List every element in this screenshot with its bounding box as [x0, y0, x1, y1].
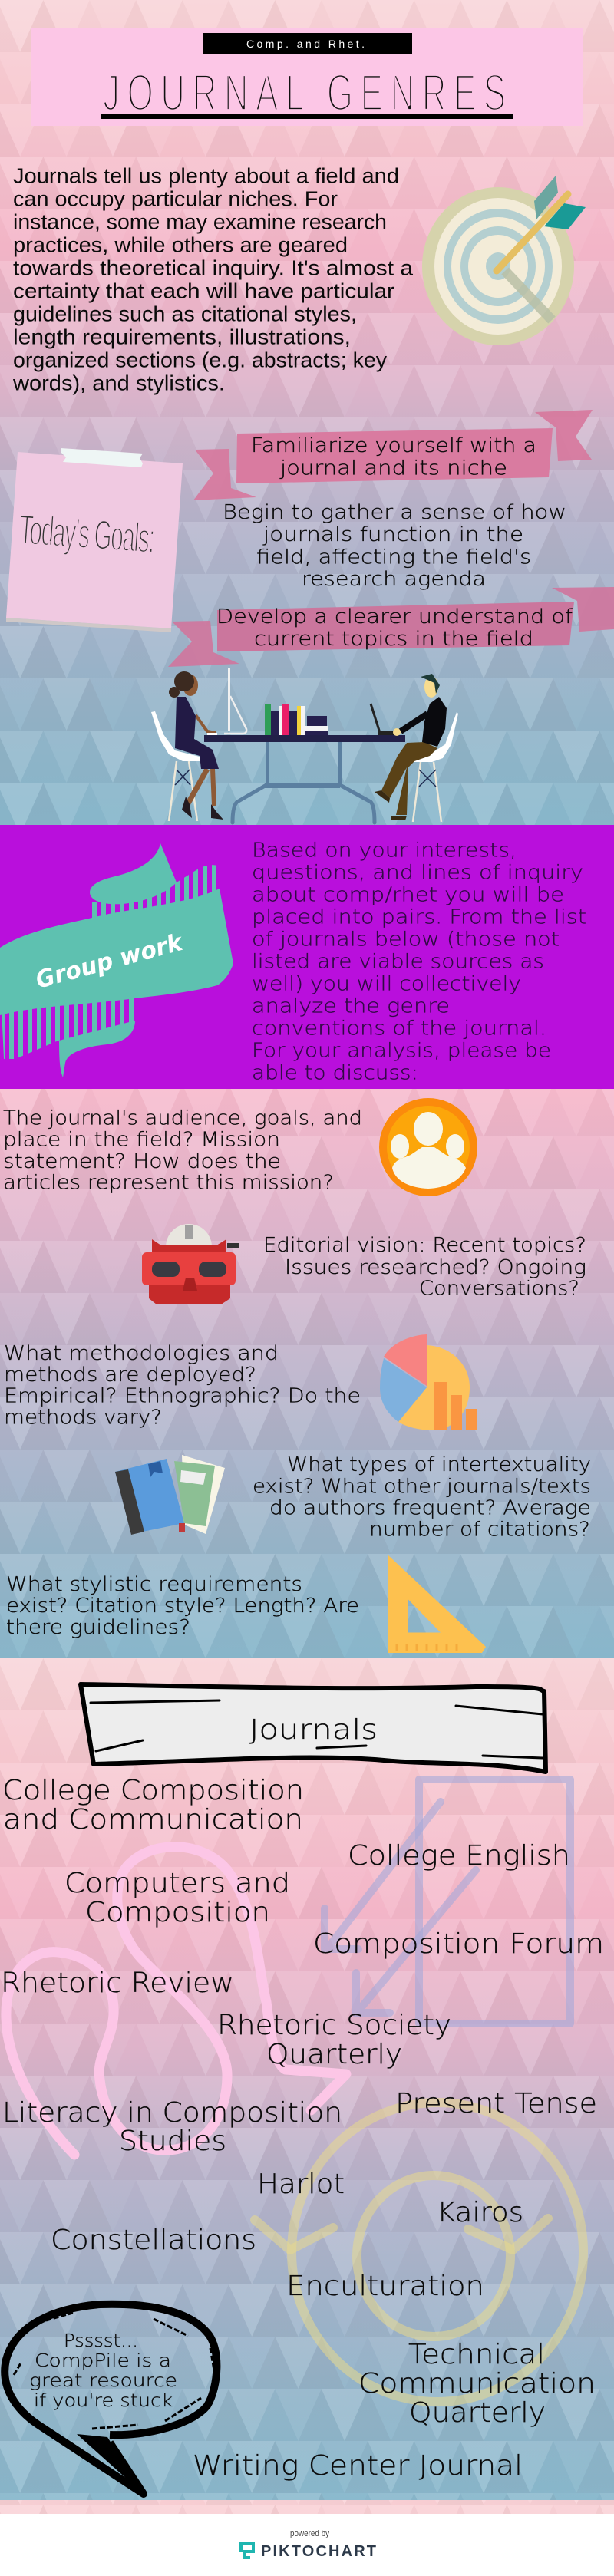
monitor	[207, 668, 246, 735]
group work instructions: listed are viable sources as	[252, 950, 544, 973]
ribbon: goal one	[193, 410, 593, 500]
journal: College English: College English	[348, 1840, 570, 1872]
icon: Piktochart logo	[241, 2544, 253, 2558]
group work instructions: well) you will collectively	[252, 973, 521, 996]
footer: powered by Piktochart	[0, 2514, 614, 2576]
goal three text	[216, 605, 573, 651]
question: intertextuality: do authors frequent? Average	[269, 1497, 591, 1520]
decoration: blue rectangle with arrows	[325, 1779, 570, 2024]
panel: today's goals note	[6, 448, 183, 632]
goal two text	[223, 501, 566, 591]
question: editorial vision: Issues researched? Ongoing	[285, 1256, 586, 1279]
question: intertextuality: exist? What other journals/texts	[253, 1476, 591, 1499]
journal: Writing Center Journal: Writing Center Journal	[193, 2450, 523, 2482]
intro paragraph: practices, while others are geared	[13, 233, 348, 256]
journal: Rhetoric Review: Rhetoric Review	[1, 1967, 234, 1999]
question: methodologies	[4, 1342, 361, 1429]
journal: Enculturation: Enculturation	[286, 2271, 484, 2302]
goal two text: journals function in the	[262, 523, 523, 546]
question: audience and goals: articles represent this mission?	[3, 1172, 334, 1195]
tape	[61, 448, 143, 467]
journal: Computers and Composition	[64, 1868, 290, 1928]
question: audience and goals: place in the field? Mission	[3, 1128, 280, 1151]
question: methodologies: methods vary?	[4, 1406, 162, 1429]
laptop	[371, 704, 395, 735]
question: intertextuality: number of citations?	[369, 1518, 590, 1541]
question: stylistic requirements: there guidelines?	[6, 1616, 190, 1639]
question: editorial vision	[263, 1234, 586, 1300]
group work instructions: able to discuss:	[252, 1062, 418, 1085]
journal: Literacy in Composition Studies: Studies	[119, 2126, 226, 2157]
journal: Present Tense: Present Tense	[395, 2088, 597, 2119]
group work instructions: conventions of the journal.	[252, 1018, 546, 1041]
question: stylistic requirements	[6, 1573, 359, 1639]
ribbon: group work	[0, 843, 233, 1077]
journal: Technical Communication Quarterly: Quarterly	[409, 2397, 546, 2429]
group work instructions	[252, 839, 586, 1085]
bubble text: great resource	[29, 2371, 177, 2391]
decoration: pink scribble	[6, 1847, 346, 2155]
icon: audience group	[379, 1098, 477, 1196]
journal: Kairos: Kairos	[437, 2197, 523, 2228]
group work instructions: about comp/rhet you will be	[252, 884, 564, 907]
intro paragraph: towards theoretical inquiry. It's almost a	[13, 256, 413, 279]
banner: journals heading	[81, 1684, 546, 1772]
question: intertextuality: What types of intertextuality	[287, 1453, 591, 1476]
speech bubble: CompPile tip	[5, 2304, 216, 2494]
bubble text: CompPile is a	[35, 2351, 171, 2371]
intro paragraph	[12, 164, 413, 394]
goal one text	[251, 434, 536, 480]
question: stylistic requirements: exist? Citation style? Length? Are	[6, 1595, 359, 1618]
group work instructions: Based on your interests,	[252, 839, 517, 863]
icon: pie and bar chart	[380, 1334, 477, 1430]
journal: Harlot: Harlot	[257, 2169, 345, 2200]
intro paragraph: Journals tell us plenty about a field and	[13, 164, 399, 187]
question: audience and goals: statement? How does the	[3, 1150, 281, 1173]
note label: Today's Goals:	[18, 507, 157, 562]
journal: Literacy in Composition Studies: Literacy in Composition	[2, 2097, 342, 2129]
goal two text: Begin to gather a sense of how	[223, 501, 566, 524]
icon: set square ruler	[388, 1555, 486, 1653]
journal: Rhetoric Society Quarterly: Quarterly	[266, 2039, 402, 2070]
illustration: two people at a desk	[151, 668, 458, 823]
journal: Technical Communication Quarterly: Technical	[408, 2339, 545, 2370]
title text: JOURNAL GENRES	[103, 64, 506, 122]
journal: Computers and Composition: Computers and	[64, 1868, 290, 1899]
group work instructions: For your analysis, please be	[252, 1039, 551, 1062]
journal list	[1, 1775, 604, 2482]
group work instructions: questions, and lines of inquiry	[252, 861, 583, 884]
ribbon label: Group work	[33, 928, 187, 994]
icon: target with arrow	[422, 176, 586, 345]
panel: intro background	[0, 0, 614, 825]
bubble text	[29, 2331, 177, 2411]
journal: Rhetoric Society Quarterly	[217, 2010, 451, 2070]
journal: Technical Communication Quarterly: Communication	[358, 2368, 596, 2400]
woman	[169, 671, 223, 820]
ribbon: goal three	[168, 587, 614, 667]
icon: view-master	[142, 1224, 239, 1304]
books	[265, 704, 328, 735]
group work instructions: analyze the genre	[252, 994, 450, 1018]
question: editorial vision: Editorial vision: Recent topics?	[263, 1234, 586, 1257]
goal two text: field, affecting the field's	[256, 546, 531, 569]
question: intertextuality	[253, 1453, 591, 1541]
journal: CCC	[2, 1775, 304, 1836]
bubble text: if you're stuck	[34, 2391, 173, 2411]
Piktochart wordmark: PIKTOCHART	[261, 2543, 376, 2560]
right chair	[409, 712, 458, 822]
intro paragraph: can occupy particular niches. For	[13, 187, 338, 210]
goal three text: current topics in the field	[254, 628, 533, 651]
panel: group work band	[0, 825, 614, 1089]
icon: notebooks	[115, 1455, 225, 1535]
footer strip	[0, 2500, 614, 2514]
panel: title block	[31, 28, 583, 126]
goal three text: Develop a clearer understand of	[216, 605, 573, 628]
intro paragraph: organized sections (e.g. abstracts; key	[13, 348, 387, 371]
question: audience and goals	[3, 1107, 362, 1195]
subtitle bar	[203, 33, 412, 54]
intro paragraph: certainty that each will have particular	[13, 279, 394, 302]
panel: discussion questions background	[0, 1089, 614, 1658]
journal: CCC: College Composition	[2, 1775, 304, 1806]
banner label: Journals	[249, 1714, 378, 1746]
table	[204, 735, 405, 823]
goal two text: research agenda	[302, 568, 486, 591]
question: methodologies: What methodologies and	[4, 1342, 279, 1365]
decoration: yellow smiley	[255, 2103, 583, 2402]
powered by text: powered by	[290, 2529, 329, 2538]
journal: Literacy in Composition Studies	[2, 2097, 342, 2157]
man	[375, 674, 447, 820]
journal: Rhetoric Society Quarterly: Rhetoric Society	[217, 2010, 451, 2041]
goal one text: Familiarize yourself with a	[251, 434, 536, 457]
journal: Composition Forum: Composition Forum	[313, 1928, 604, 1960]
intro paragraph: guidelines such as citational styles,	[13, 302, 357, 325]
journal: Constellations: Constellations	[51, 2225, 256, 2256]
intro paragraph: length requirements, illustrations,	[13, 325, 351, 348]
question: stylistic requirements: What stylistic requirements	[6, 1573, 302, 1596]
intro paragraph: words), and stylistics.	[12, 371, 225, 394]
journal: Technical Communication Quarterly	[358, 2339, 596, 2429]
bubble text: Psssst...	[64, 2331, 138, 2351]
panel: journals background	[0, 1658, 614, 2500]
group work instructions: placed into pairs. From the list	[252, 905, 586, 928]
question: editorial vision: Conversations?	[419, 1277, 579, 1300]
question: audience and goals: The journal's audience, goals, and	[3, 1107, 362, 1130]
goal one text: journal and its niche	[279, 457, 507, 480]
group work instructions: of journals below (those not	[252, 928, 560, 952]
journal: CCC: and Communication	[3, 1804, 303, 1836]
left chair	[151, 711, 200, 821]
journal: Computers and Composition: Composition	[85, 1897, 270, 1928]
intro paragraph: instance, some may examine research	[13, 210, 387, 233]
question: methodologies: Empirical? Ethnographic? Do the	[4, 1385, 361, 1408]
subtitle bar: Comp. and Rhet.	[246, 38, 365, 50]
question: methodologies: methods are deployed?	[4, 1364, 256, 1387]
